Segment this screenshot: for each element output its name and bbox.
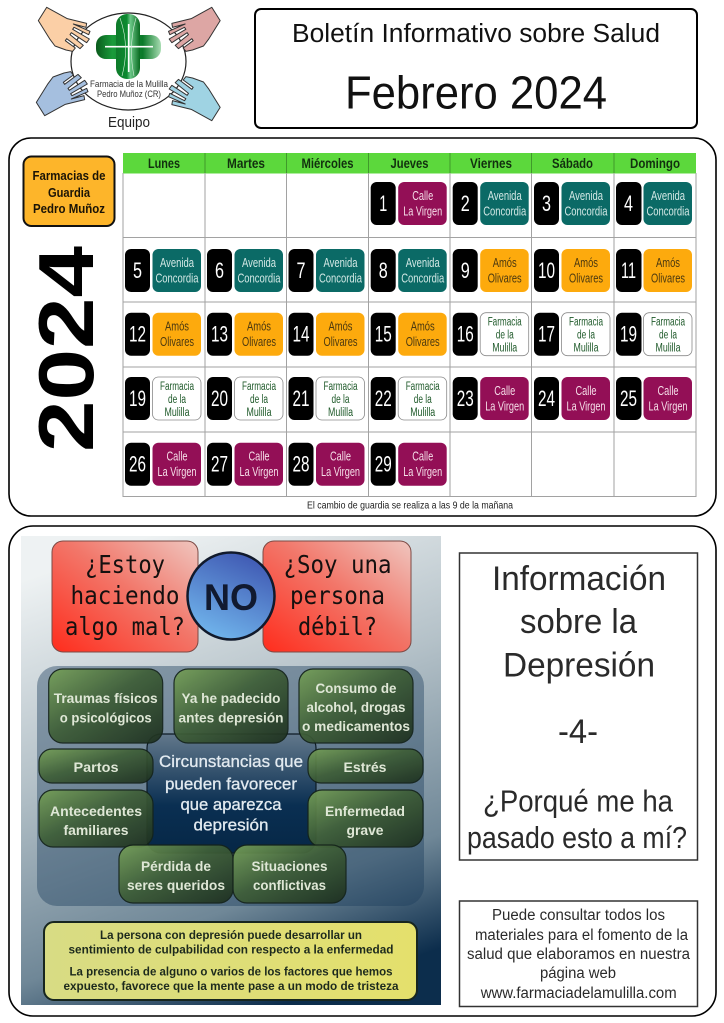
yellow note: expuesto, favorece que la mente pase a un modo de tristeza bbox=[64, 979, 399, 993]
day 25: Calle bbox=[658, 383, 678, 398]
question: Estoy haciendo algo mal: ¿Estoy bbox=[85, 550, 165, 579]
NO circle bbox=[188, 552, 274, 640]
factor: Situaciones: Situaciones bbox=[252, 858, 328, 874]
web info box: www.farmaciadelamulilla.com bbox=[480, 985, 677, 1002]
calendar header: Viernes bbox=[470, 156, 512, 171]
day 10: 10 bbox=[538, 258, 555, 283]
day 17: Farmacia bbox=[569, 317, 603, 329]
day 2: 2 bbox=[461, 191, 470, 216]
factor: Ya he padecido: Ya he padecido bbox=[182, 690, 280, 706]
day 1 bbox=[371, 182, 447, 225]
factor: Perdida: seres queridos bbox=[127, 877, 225, 893]
day 6: Concordia bbox=[238, 270, 281, 286]
factor: Enfermedad: grave bbox=[346, 822, 384, 838]
icon: peach hand bbox=[38, 7, 90, 51]
factor: Consumo: alcohol, drogas bbox=[306, 699, 406, 715]
day 2: Avenida bbox=[488, 188, 522, 203]
yellow note: sentimiento de culpabilidad con respecto a la enfermedad bbox=[68, 943, 394, 957]
day 16: de la bbox=[496, 330, 514, 342]
day 26: 26 bbox=[129, 452, 146, 477]
day 5: Avenida bbox=[160, 255, 195, 270]
day 9: 9 bbox=[461, 258, 470, 283]
factor: Perdida: Pérdida de bbox=[141, 858, 211, 874]
day 22: Farmacia bbox=[406, 381, 440, 393]
day 29: Calle bbox=[412, 449, 433, 464]
panel: depression info bbox=[9, 526, 716, 1016]
day 25 bbox=[616, 377, 692, 420]
day 21: de la bbox=[332, 394, 350, 406]
factors panel bbox=[37, 666, 424, 906]
title box: Informacion sobre la Depresion bbox=[460, 553, 698, 860]
day 1: Calle bbox=[412, 188, 433, 203]
day 26 bbox=[125, 443, 201, 486]
day 9: Olivares bbox=[488, 270, 522, 286]
day 21: Mulilla bbox=[328, 407, 353, 419]
day 11: Olivares bbox=[651, 270, 685, 286]
day 2 bbox=[453, 182, 529, 225]
day 19: Farmacia bbox=[160, 381, 194, 393]
day 11: Amós bbox=[656, 255, 680, 270]
factor: Traumas: o psicológicos bbox=[60, 710, 152, 726]
logo text: Equipo bbox=[108, 114, 150, 131]
day 6 bbox=[207, 249, 283, 292]
day 29 bbox=[371, 443, 447, 486]
web info box: salud que elaboramos en nuestra bbox=[467, 946, 690, 963]
day 28 bbox=[288, 443, 364, 486]
day 23: 23 bbox=[457, 386, 474, 411]
day 4: Avenida bbox=[651, 188, 686, 203]
badge: Farmacias de Guardia bbox=[24, 156, 114, 226]
header box bbox=[255, 9, 697, 128]
calendar header: Lunes bbox=[148, 156, 180, 171]
day 16: 16 bbox=[457, 322, 474, 347]
question: Estoy haciendo algo mal: algo mal? bbox=[65, 612, 185, 641]
logo text: Pedro Muñoz (CR) bbox=[97, 89, 161, 100]
day 3: 3 bbox=[542, 191, 551, 216]
factor: Ya he padecido bbox=[174, 669, 288, 743]
day 13: Amós bbox=[247, 319, 271, 334]
factor: Antecedentes: Antecedentes bbox=[50, 803, 142, 819]
day 6: Avenida bbox=[242, 255, 277, 270]
day 8 bbox=[371, 249, 447, 292]
day 5 bbox=[125, 249, 201, 292]
day 7 bbox=[288, 249, 364, 292]
factor: Partos: Partos bbox=[74, 759, 119, 775]
day 19 (Sunday): de la bbox=[659, 330, 677, 342]
day 14 bbox=[288, 313, 364, 356]
calendar header bbox=[123, 153, 696, 174]
title box: Informacion sobre la Depresion: Depresión bbox=[503, 647, 655, 685]
day 22: de la bbox=[414, 394, 432, 406]
day 5: Concordia bbox=[156, 270, 199, 286]
day 26: Calle bbox=[166, 449, 188, 464]
day 16: Mulilla bbox=[492, 343, 518, 355]
day 22 bbox=[371, 377, 447, 420]
day 17: Mulilla bbox=[574, 343, 599, 355]
center text: pueden favorecer bbox=[165, 776, 298, 794]
calendar header: Domingo bbox=[630, 156, 680, 171]
title box: Informacion sobre la Depresion: Información bbox=[492, 560, 666, 598]
day 27: La Virgen bbox=[240, 464, 278, 479]
yellow note: La presencia de alguno o varios de los factores que hemos bbox=[70, 965, 393, 979]
question: Soy una persona debil: ¿Soy una bbox=[284, 550, 392, 579]
center text: Circunstancias que bbox=[159, 753, 303, 771]
day 8: Concordia bbox=[401, 270, 445, 286]
day 24: 24 bbox=[538, 386, 555, 411]
question: Soy una persona debil: débil? bbox=[298, 612, 377, 641]
header month: Febrero 2024 bbox=[345, 66, 607, 118]
day 7: Avenida bbox=[324, 255, 358, 270]
center text: depresión bbox=[194, 816, 268, 834]
day 20 bbox=[207, 377, 283, 420]
factor: Consumo bbox=[299, 669, 413, 743]
web info box: página web bbox=[540, 965, 616, 982]
day 29: 29 bbox=[375, 452, 392, 477]
center text: que aparezca bbox=[180, 796, 282, 814]
day 1: 1 bbox=[379, 191, 387, 216]
day 24: Calle bbox=[576, 383, 596, 398]
icon: pink hand bbox=[169, 7, 220, 51]
day 21: Farmacia bbox=[324, 381, 358, 393]
day 8: Avenida bbox=[406, 255, 440, 270]
badge: Farmacias de Guardia: Farmacias de bbox=[32, 168, 106, 183]
center text bbox=[159, 753, 303, 834]
calendar header: Sábado bbox=[552, 156, 593, 171]
year vertical: 2024 bbox=[22, 246, 110, 452]
day 28: La Virgen bbox=[321, 464, 360, 479]
factor: Estres bbox=[308, 749, 423, 783]
factor: Traumas bbox=[49, 669, 163, 743]
day 14: Olivares bbox=[324, 334, 358, 349]
day 17: 17 bbox=[538, 322, 555, 347]
factor: Consumo: Consumo de bbox=[316, 680, 397, 696]
factor: Estres: Estrés bbox=[344, 759, 387, 775]
day 12: Olivares bbox=[160, 334, 194, 349]
day 14: 14 bbox=[292, 322, 310, 347]
day 19: Mulilla bbox=[164, 407, 190, 419]
day 3 bbox=[534, 182, 610, 225]
infographic image bbox=[21, 536, 441, 1005]
day 8: 8 bbox=[379, 258, 388, 283]
day 12: 12 bbox=[129, 322, 146, 347]
factor: Enfermedad: Enfermedad bbox=[325, 803, 405, 819]
day 28: Calle bbox=[330, 449, 351, 464]
icon: blue hand bbox=[36, 72, 88, 116]
calendar header: Miércoles bbox=[302, 156, 354, 171]
day 15: Olivares bbox=[406, 334, 440, 349]
day 23: La Virgen bbox=[485, 398, 524, 414]
day 22: 22 bbox=[375, 386, 392, 411]
yellow note bbox=[44, 922, 417, 1000]
factor: Consumo: o medicamentos bbox=[302, 718, 410, 734]
factor: Enfermedad bbox=[308, 790, 423, 847]
NO circle: NO bbox=[204, 577, 258, 618]
title box: Informacion sobre la Depresion: sobre la bbox=[520, 603, 637, 641]
day 19 bbox=[125, 377, 201, 420]
logo ellipse bbox=[71, 13, 186, 110]
day 3: Concordia bbox=[564, 204, 608, 218]
day 19 (Sunday): Farmacia bbox=[651, 317, 685, 329]
factor: Situaciones bbox=[233, 845, 346, 903]
day 19 (Sunday): Mulilla bbox=[656, 343, 681, 355]
day 16: Farmacia bbox=[488, 317, 522, 329]
day 27 bbox=[207, 443, 283, 486]
factor: Perdida bbox=[119, 845, 233, 903]
day 26: La Virgen bbox=[158, 464, 196, 479]
question: Estoy haciendo algo mal bbox=[52, 541, 198, 652]
footnote: El cambio de guardia se realiza a las 9 de la mañana bbox=[307, 500, 513, 512]
badge: Farmacias de Guardia: Pedro Muñoz bbox=[33, 201, 105, 216]
day 19 (Sunday) bbox=[616, 313, 692, 356]
question: Soy una persona debil: persona bbox=[290, 581, 385, 610]
day 13: Olivares bbox=[242, 334, 276, 349]
title box: Informacion sobre la Depresion: ¿Porqué me ha bbox=[483, 784, 674, 819]
day 20: de la bbox=[250, 394, 268, 406]
day 17: de la bbox=[577, 330, 595, 342]
day 24 bbox=[534, 377, 610, 420]
day 4: 4 bbox=[624, 191, 633, 216]
day 29: La Virgen bbox=[403, 464, 442, 479]
day 21 bbox=[288, 377, 364, 420]
day 23: Calle bbox=[494, 383, 515, 398]
day 15: 15 bbox=[375, 322, 392, 347]
day 20: Farmacia bbox=[242, 381, 276, 393]
day 9 bbox=[453, 249, 529, 292]
day 23 bbox=[453, 377, 529, 420]
question: Soy una persona debil bbox=[263, 541, 411, 652]
web info box: materiales para el fomento de la bbox=[475, 927, 688, 944]
yellow note: La persona con depresión puede desarrollar un bbox=[100, 928, 362, 942]
day 9: Amós bbox=[493, 255, 517, 270]
day 24: La Virgen bbox=[566, 398, 606, 414]
calendar header: Jueves bbox=[390, 156, 428, 171]
day 27: Calle bbox=[248, 449, 270, 464]
day 7: Concordia bbox=[319, 270, 363, 286]
day 6: 6 bbox=[215, 258, 224, 283]
factor: Situaciones: conflictivas bbox=[253, 877, 326, 893]
day 13 bbox=[207, 313, 283, 356]
calendar header: Martes bbox=[227, 156, 265, 171]
icon: green cross bbox=[96, 14, 161, 79]
title box: Informacion sobre la Depresion: pasado esto a mí? bbox=[467, 820, 687, 855]
factor: Partos bbox=[39, 749, 153, 783]
day 4: Concordia bbox=[646, 204, 690, 218]
center box bbox=[147, 734, 316, 853]
day 15: Amós bbox=[411, 319, 435, 334]
day 27: 27 bbox=[211, 452, 228, 477]
panel: calendar bbox=[9, 138, 716, 516]
question: Estoy haciendo algo mal: haciendo bbox=[70, 581, 180, 610]
day 4 bbox=[616, 182, 692, 225]
factor: Traumas: Traumas físicos bbox=[54, 690, 158, 706]
day 5: 5 bbox=[133, 258, 142, 283]
header title: Boletín Informativo sobre Salud bbox=[292, 20, 660, 48]
day 25: La Virgen bbox=[648, 398, 688, 414]
day 10 bbox=[534, 249, 610, 292]
day 15 bbox=[371, 313, 447, 356]
factor: Antecedentes: familiares bbox=[64, 822, 129, 838]
logo text bbox=[90, 79, 169, 131]
day 2: Concordia bbox=[483, 204, 527, 218]
day 10: Amós bbox=[574, 255, 598, 270]
factor: Ya he padecido: antes depresión bbox=[178, 710, 284, 726]
day 28: 28 bbox=[292, 452, 310, 477]
day 25: 25 bbox=[620, 386, 637, 411]
day 11 bbox=[616, 249, 692, 292]
logo text: Farmacia de la Mulilla bbox=[90, 79, 169, 90]
day 12: Amós bbox=[165, 319, 189, 334]
badge: Farmacias de Guardia: Guardia bbox=[48, 185, 91, 200]
day 1: La Virgen bbox=[403, 204, 442, 218]
day 10: Olivares bbox=[569, 270, 603, 286]
day 19 (Sunday): 19 bbox=[620, 322, 637, 347]
day 13: 13 bbox=[211, 322, 228, 347]
title box: Informacion sobre la Depresion: -4- bbox=[558, 713, 598, 751]
day 22: Mulilla bbox=[410, 407, 436, 419]
day 11: 11 bbox=[621, 258, 636, 283]
day 20: 20 bbox=[211, 386, 228, 411]
day 7: 7 bbox=[296, 258, 306, 283]
day 20: Mulilla bbox=[246, 407, 272, 419]
web info box: Puede consultar todos los bbox=[492, 907, 665, 924]
icon: light blue hand bbox=[169, 77, 220, 121]
logo: Equipo Farmacia de la Mulilla bbox=[36, 7, 220, 131]
day 19: de la bbox=[168, 394, 186, 406]
day 14: Amós bbox=[328, 319, 353, 334]
day 19: 19 bbox=[129, 386, 146, 411]
factor: Antecedentes bbox=[39, 790, 153, 847]
day 17 bbox=[534, 313, 610, 356]
web info box bbox=[460, 901, 698, 1006]
day 16 bbox=[453, 313, 529, 356]
day 12 bbox=[125, 313, 201, 356]
day 3: Avenida bbox=[569, 188, 604, 203]
day 21: 21 bbox=[292, 386, 310, 411]
